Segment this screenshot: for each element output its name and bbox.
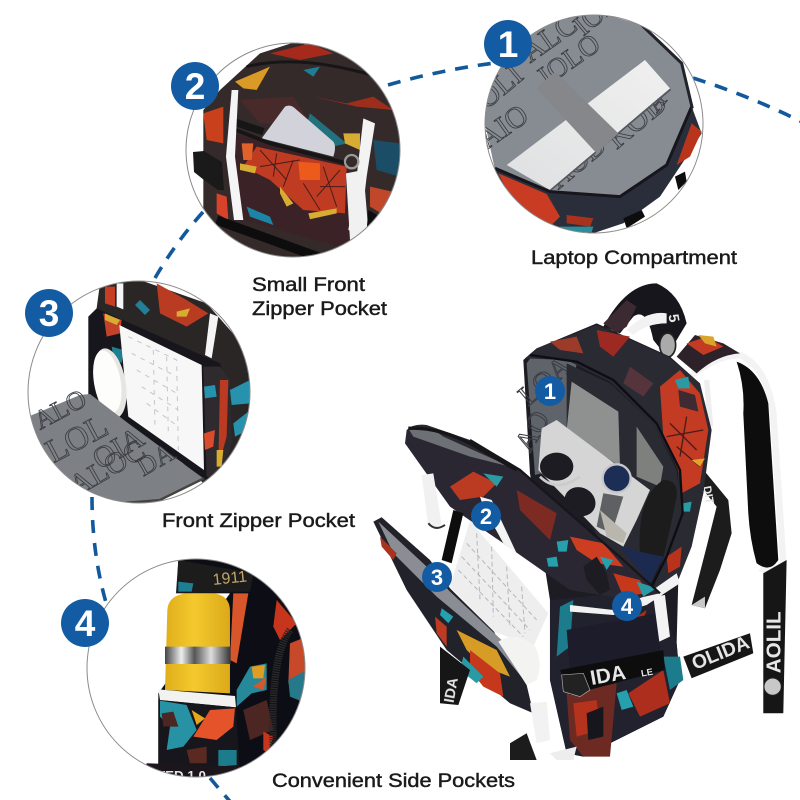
lower left strap [440, 647, 470, 705]
web pattern lines [260, 150, 345, 210]
pocket dark interior [88, 308, 230, 480]
bottom zipper [217, 220, 327, 260]
white tapes [117, 283, 123, 309]
panel: front zipper pocket circle: OIA [87, 421, 150, 476]
icon: strap buckle [562, 673, 590, 697]
lower body print [550, 590, 680, 757]
zipper [273, 630, 290, 750]
white piping [226, 90, 243, 220]
badge 3 (backpack) [422, 562, 452, 592]
sunglasses [540, 453, 601, 522]
badge 2 [171, 62, 219, 110]
top zipper [530, 355, 683, 587]
label: front zipper pocket: Front Zipper Pocket [162, 510, 356, 532]
mouse [498, 637, 540, 685]
badge 1 (backpack): 1 [544, 379, 556, 404]
panel: small front zipper pocket circle [203, 44, 400, 256]
badge 3: 3 [39, 293, 59, 334]
label: small front zipper pocket: Zipper Pocket [252, 298, 388, 320]
badge 4 [61, 599, 109, 647]
body strap [560, 650, 665, 695]
bottom strap [143, 763, 240, 783]
badge 4: 4 [75, 603, 96, 644]
phone and black device [583, 557, 610, 595]
panel: front zipper pocket circle: DA [131, 436, 180, 482]
bottom front zipper pull [530, 702, 550, 743]
keyboard [450, 521, 548, 647]
pocket trim [158, 689, 236, 707]
badge 4 (backpack): 4 [621, 594, 634, 619]
panel: front zipper pocket circle: ALO [29, 383, 91, 435]
backpack illustration: IDA [442, 676, 462, 704]
laptop [507, 60, 670, 190]
lining letter pattern: AOD [542, 128, 613, 195]
top strap [176, 560, 253, 593]
keyboard [119, 325, 204, 470]
opened flap lining [28, 394, 203, 510]
label: small front zipper pocket: Small Front [252, 274, 366, 296]
lining letter pattern [486, 16, 668, 190]
main compartment lining [527, 352, 577, 475]
pocket print [158, 700, 239, 767]
icon: side buckle [193, 151, 224, 190]
pocket panel [373, 517, 533, 713]
body print [230, 593, 248, 663]
panel: front zipper pocket circle: ALOC [64, 433, 151, 503]
shoulder strap pad [737, 362, 778, 568]
bottom buckle [510, 733, 537, 760]
lower strap [763, 560, 787, 713]
bottle [165, 593, 230, 693]
backpack illustration: LOA [513, 350, 578, 412]
right printed trim [203, 367, 232, 477]
zipper pull [346, 170, 368, 240]
badge 3 (backpack): 3 [431, 565, 443, 590]
backpack illustration: IDA [589, 661, 628, 690]
panel: side pockets circle [146, 560, 304, 776]
lining [480, 10, 693, 200]
upper printed flap [525, 325, 712, 588]
printed rim [495, 107, 702, 233]
lining letter pattern: ALC [515, 8, 583, 69]
backpack illustration: 5 [664, 313, 682, 324]
panel: side pockets circle: 1911 [212, 568, 248, 589]
watch [597, 464, 631, 533]
backpack illustration: DIT [700, 485, 715, 505]
left zipper pull [422, 473, 442, 527]
panel: laptop compartment circle [486, 16, 702, 232]
bottle band [165, 647, 231, 664]
badge 2 (backpack) [471, 501, 501, 531]
side webbing strap [692, 472, 732, 608]
backpack illustration: AO [509, 406, 557, 457]
pocket panel [262, 142, 329, 161]
shoulder strap piping [690, 355, 783, 570]
upper front pocket flap [405, 425, 660, 600]
lining letter pattern: KOD [599, 84, 674, 155]
inner screen panel [567, 382, 620, 467]
lining letter pattern: AIO [472, 98, 534, 156]
badge 1 (backpack) [535, 376, 565, 406]
main body shell [523, 323, 711, 757]
umbrella [640, 480, 677, 557]
mouse [93, 348, 126, 416]
AOLIDA strap text: AOLIL [763, 611, 786, 673]
lining letter pattern: OLI [470, 58, 529, 115]
laptop [538, 420, 650, 547]
printed fabric [203, 43, 407, 263]
badge 1 [484, 20, 532, 68]
badge 2: 2 [185, 66, 205, 107]
panel: side pockets circle: ITED 1 0 [153, 768, 206, 783]
badge 4 (backpack) [612, 591, 642, 621]
top grab handle [603, 283, 687, 357]
bag body [158, 560, 300, 768]
phone [262, 106, 335, 157]
backpack illustration [373, 283, 787, 760]
badge 2 (backpack): 2 [480, 504, 492, 529]
panel: front zipper pocket circle: LOL [40, 407, 114, 470]
white zipper pull [653, 595, 670, 642]
printed back fabric [88, 280, 253, 497]
lining letter pattern: A [641, 87, 672, 117]
side pocket white trim [570, 573, 680, 615]
black side panel [442, 510, 463, 563]
backpack illustration: LE [640, 667, 654, 679]
badge 3 [25, 289, 73, 337]
label: convenient side pockets: Convenient Side Pockets [272, 770, 515, 792]
label: laptop compartment: Laptop Compartment [531, 247, 738, 269]
badge 1: 1 [498, 24, 518, 65]
elastic strap [537, 72, 618, 153]
top zipper [247, 62, 377, 77]
shoulder strap top print [677, 335, 740, 373]
diagonal strap [683, 633, 753, 678]
zipper edge [495, 107, 692, 197]
backpack illustration: OLIDA [689, 633, 753, 675]
inner dark compartment [567, 363, 682, 585]
white tape [480, 497, 517, 553]
panel: front zipper pocket circle [28, 280, 253, 510]
pocket zipper [232, 128, 347, 163]
lining letter pattern: IOLO [533, 28, 606, 92]
